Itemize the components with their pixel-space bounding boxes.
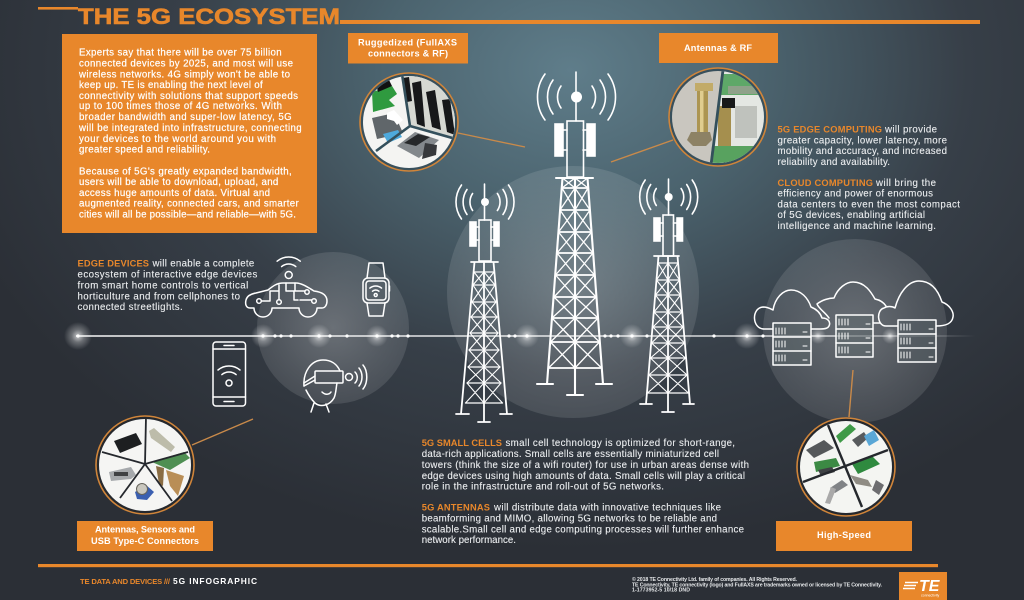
text: 5G edge and cloud computing: mobility and accuracy, and increased (778, 146, 947, 157)
intro text panel: cities will all be possible—and reliable—with 5G. (79, 209, 296, 220)
text: 5G small cells and antennas: will distribute data with innovative techniques like (493, 503, 721, 514)
footer title: 5G INFOGRAPHIC (173, 576, 257, 586)
text: 5G small cells and antennas (422, 438, 749, 546)
intro text panel: connectivity with solutions that support speeds (79, 91, 298, 102)
text: 5G small cells and antennas: scalable.Small cell and edge computing processes will further enhance (422, 525, 744, 536)
label: antennas and RF (659, 33, 778, 63)
text: edge devices: connected streetlights. (78, 302, 183, 313)
light beam with glowing nodes (64, 322, 976, 350)
intro text panel: Because of 5G's greatly expanded bandwidth, (79, 166, 292, 177)
intro text panel: your devices to the world around you with (79, 134, 276, 145)
text: 5G small cells and antennas: data-rich applications. Small cells are essentially miniaturized cell (422, 449, 719, 460)
glow circles behind devices, towers and cloud (257, 166, 947, 423)
text: 5G small cells and antennas: role in the infrastructure and roll-out of 5G networks. (422, 482, 664, 492)
intro text panel: connected devices by 2025, and most will use (79, 59, 293, 70)
text: 5G edge and cloud computing: CLOUD COMPUTING (778, 178, 873, 188)
text: 5G edge and cloud computing: will provide (884, 124, 937, 136)
text: 5G small cells and antennas: small cell technology is optimized for short-range, (506, 438, 735, 449)
footer title: TE DATA AND DEVICES /// (80, 577, 171, 586)
icon: smart watch (363, 263, 390, 316)
text: 5G edge and cloud computing: of 5G devices, enabling artificial (778, 210, 925, 221)
text: edge devices (78, 259, 257, 313)
icon: smartphone (213, 342, 246, 406)
intro text panel: up to 100 times those of 4G networks. With (79, 101, 282, 112)
footer rule (38, 564, 938, 567)
tower: left small cell (456, 184, 514, 422)
intro text panel: broader bandwidth and super-low latency, 5G (79, 112, 292, 123)
intro text panel: greater speed and reliability. (79, 145, 210, 156)
intro text panel: wireless networks. 4G simply won't be able to (78, 70, 290, 81)
logo: connectivity (921, 594, 940, 598)
text: edge devices: ecosystem of interactive edge devices (78, 270, 257, 281)
inset: antennas, sensors and USB type-C (96, 416, 253, 514)
intro text panel: augmented reality, connected cars, and smarter (79, 199, 299, 210)
title (38, 4, 980, 29)
label: ruggedized: connectors & RF) (368, 49, 448, 59)
text: edge devices: horticulture and from cellphones to (78, 291, 240, 302)
inset: ruggedized connectors (360, 73, 525, 174)
text: edge devices: will enable a complete (152, 259, 254, 270)
intro text panel: will be integrated into infrastructure, connecting (78, 123, 302, 134)
title: THE 5G ECOSYSTEM (78, 4, 340, 29)
label: antennas and RF: Antennas & RF (684, 43, 752, 53)
text: edge devices: EDGE DEVICES (78, 259, 149, 269)
legal text (632, 576, 883, 594)
legal text: 1-1773952-5 10/18 DND (632, 588, 690, 594)
logo (899, 572, 947, 600)
label: high-speed (776, 521, 912, 551)
text: edge devices: from smart home controls to vertical (78, 280, 248, 291)
text: 5G edge and cloud computing: reliability and availability. (778, 157, 890, 168)
label: ruggedized (348, 33, 468, 64)
legal text: TE Connectivity, TE connectivity (logo) and FullAXS are trademarks owned or licensed by TE Connectivity. (632, 582, 883, 588)
icon: connected car (246, 257, 327, 317)
text: 5G edge and cloud computing: will bring the (875, 178, 936, 189)
tower: right small cell (640, 179, 698, 412)
legal text: © 2018 TE Connectivity Ltd. family of companies. All Rights Reserved. (632, 576, 798, 583)
text: 5G small cells and antennas: network performance. (422, 535, 516, 546)
text: 5G edge and cloud computing: efficiency and power of enormous (778, 188, 933, 200)
text: 5G small cells and antennas: beamforming and MIMO, allowing 5G networks to be reliable and (422, 514, 717, 524)
intro text panel: keep up. TE is enabling the next level of (79, 80, 263, 91)
text: 5G small cells and antennas: 5G SMALL CELLS (422, 438, 502, 448)
inset: high-speed connectors (797, 370, 895, 516)
text: 5G edge and cloud computing: 5G EDGE COMPUTING (778, 124, 882, 134)
text: 5G edge and cloud computing (778, 124, 960, 232)
text: 5G small cells and antennas: towers (think the size of a wifi router) for use in urban areas dense with (422, 460, 749, 471)
label: ruggedized: Ruggedized (FullAXS (358, 38, 457, 48)
intro text panel: access huge amounts of data. Virtual and (79, 188, 270, 199)
text: 5G small cells and antennas: 5G ANTENNAS (422, 503, 490, 513)
intro text panel: users will be able to download, upload, and (79, 177, 278, 188)
logo: TE (919, 578, 941, 595)
intro text panel (62, 34, 317, 233)
text: 5G small cells and antennas: edge devices using high amounts of data. Small cells will play a critical (422, 471, 745, 482)
icon: VR headset user (304, 360, 367, 412)
inset: antennas and RF (611, 68, 770, 166)
label: high-speed: High-Speed (817, 530, 871, 540)
label: antennas, sensors and USB: USB Type-C Connectors (91, 536, 199, 546)
icon: clouds with servers (754, 281, 953, 365)
tower: centre (537, 72, 616, 395)
footer title (80, 576, 257, 586)
text: 5G edge and cloud computing: intelligence and machine learning. (778, 221, 936, 232)
label: antennas, sensors and USB: Antennas, Sensors and (95, 525, 195, 535)
text: 5G edge and cloud computing: greater capacity, lower latency, more (778, 136, 947, 146)
intro text panel: Experts say that there will be over 75 billion (79, 48, 282, 59)
label: antennas, sensors and USB (77, 521, 213, 551)
text: 5G edge and cloud computing: data centers to even the most compact (778, 200, 960, 210)
